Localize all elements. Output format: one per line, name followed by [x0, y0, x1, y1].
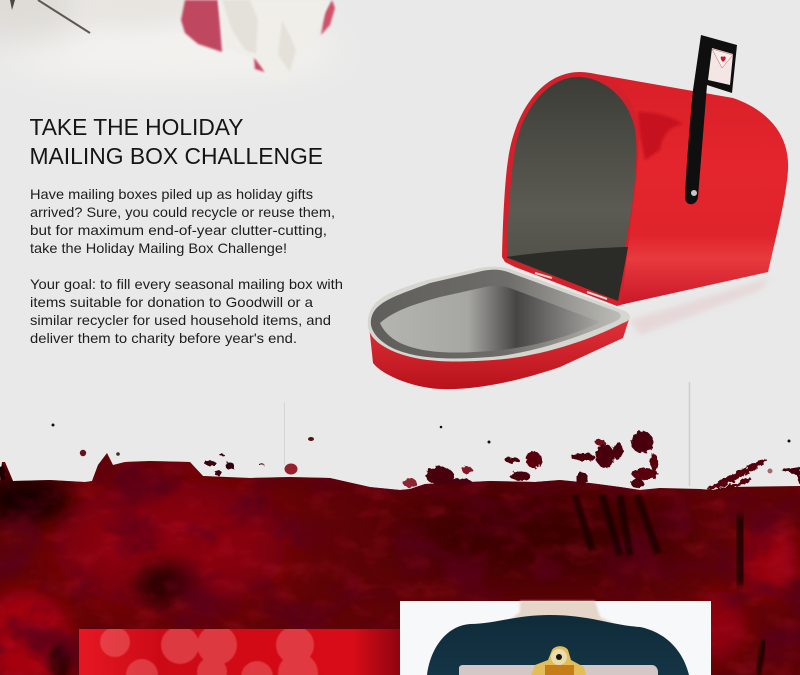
small splatter dots	[52, 424, 790, 474]
title: MAILING BOX CHALLENGE	[30, 143, 323, 169]
blood splatter band	[0, 450, 800, 675]
interior floor	[506, 247, 628, 301]
paper scratches	[284, 382, 690, 486]
ink splatter drops	[0, 431, 800, 491]
flag heart	[721, 56, 726, 62]
white ribbon	[218, 0, 330, 83]
flag rivet	[691, 190, 697, 196]
text block: intro: but for maximum end-of-year clutter-cutting,	[30, 222, 327, 238]
text block: intro: take the Holiday Mailing Box Challenge!	[30, 240, 287, 256]
interior wall	[507, 77, 636, 300]
illustration: red mailbox	[368, 35, 788, 389]
door tray	[368, 267, 630, 389]
text block: goal	[30, 276, 343, 346]
text block: intro: Have mailing boxes piled up as holiday gifts	[30, 186, 313, 202]
front rim	[502, 72, 639, 306]
title: TAKE THE HOLIDAY	[30, 114, 244, 140]
clip	[531, 646, 586, 675]
shadow	[630, 278, 770, 335]
clipboard	[459, 665, 658, 675]
mailbox body	[590, 73, 788, 305]
twig	[38, 0, 90, 33]
photo: snowy gift	[0, 0, 340, 83]
text block: goal: Your goal: to fill every seasonal mailing box with	[30, 276, 343, 292]
sweater	[427, 615, 689, 675]
neck	[505, 601, 615, 624]
text block: intro	[30, 186, 335, 256]
flag envelope	[708, 48, 733, 85]
flag arm and frame	[685, 35, 737, 204]
text block: intro: arrived? Sure, you could recycle or reuse them,	[30, 204, 335, 220]
text block: goal: items suitable for donation to Goodwill or a	[30, 294, 313, 310]
panel: red bokeh banner	[79, 625, 400, 675]
photo: person holding clipboard	[400, 601, 711, 675]
text block: goal: similar recycler for used household items, and	[30, 312, 331, 328]
body reflection	[638, 112, 683, 160]
red gift box	[181, 0, 222, 52]
title	[30, 114, 323, 169]
text block: goal: deliver them to charity before year's end.	[30, 330, 297, 346]
